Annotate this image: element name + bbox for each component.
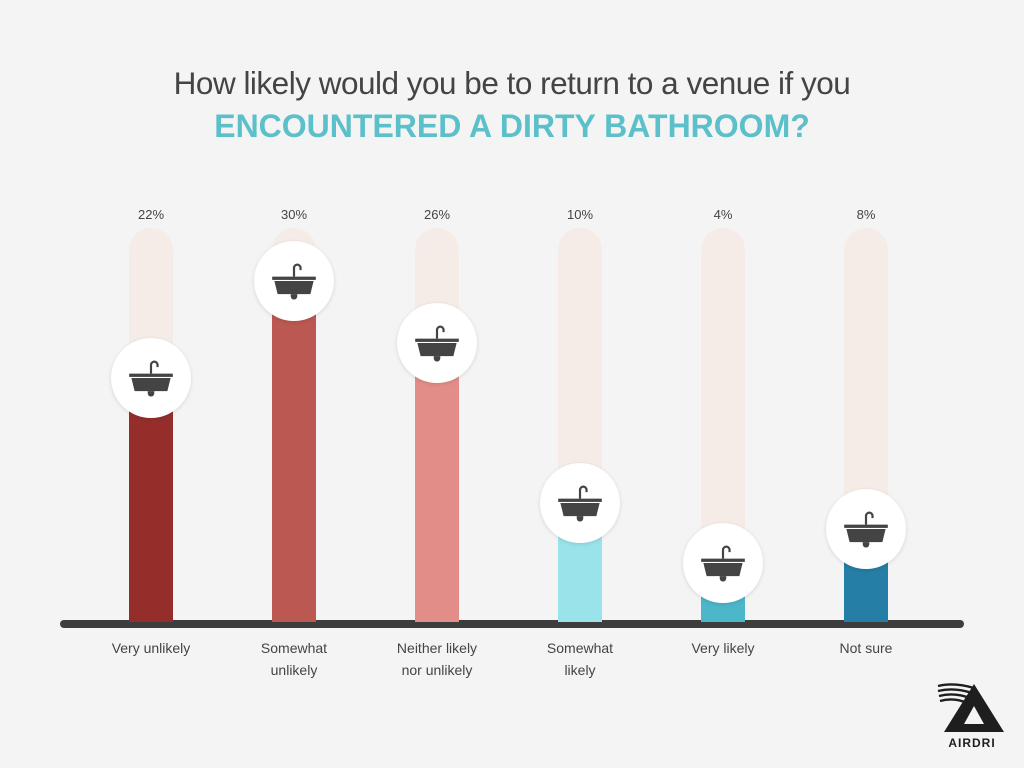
- bar: very unlikely: Very unlikely: [112, 640, 190, 656]
- logo: AIRDRI: [938, 683, 1004, 750]
- bar: very likely: 4%: [714, 207, 732, 222]
- bar: neither: [396, 207, 478, 678]
- bar: neither: nor unlikely: [402, 662, 472, 678]
- subtitle: ENCOUNTERED A DIRTY BATHROOM?: [214, 108, 810, 144]
- bar: somewhat unlikely: unlikely: [271, 662, 317, 678]
- bar: very unlikely: [110, 207, 192, 656]
- bar: somewhat unlikely: 30%: [281, 207, 307, 222]
- bar: somewhat likely: Somewhat: [547, 640, 613, 656]
- bar: somewhat likely: likely: [564, 662, 596, 678]
- bar: not sure: [825, 207, 907, 656]
- bar: neither: 26%: [424, 207, 450, 222]
- bar: very likely: Very likely: [691, 640, 755, 656]
- bar: not sure: 8%: [857, 207, 875, 222]
- bar: not sure: Not sure: [840, 640, 892, 656]
- bar: somewhat likely: [539, 207, 621, 678]
- logo: AIRDRI: AIRDRI: [948, 736, 996, 750]
- bar: somewhat unlikely: [253, 207, 335, 678]
- title: How likely would you be to return to a venue if you: [174, 65, 850, 101]
- bar: neither: Neither likely: [397, 640, 477, 656]
- bar: somewhat unlikely: Somewhat: [261, 640, 327, 656]
- baseline axis: [60, 620, 964, 628]
- bar: very likely: [682, 207, 764, 656]
- bar: very unlikely: 22%: [138, 207, 164, 222]
- bar: somewhat likely: 10%: [567, 207, 593, 222]
